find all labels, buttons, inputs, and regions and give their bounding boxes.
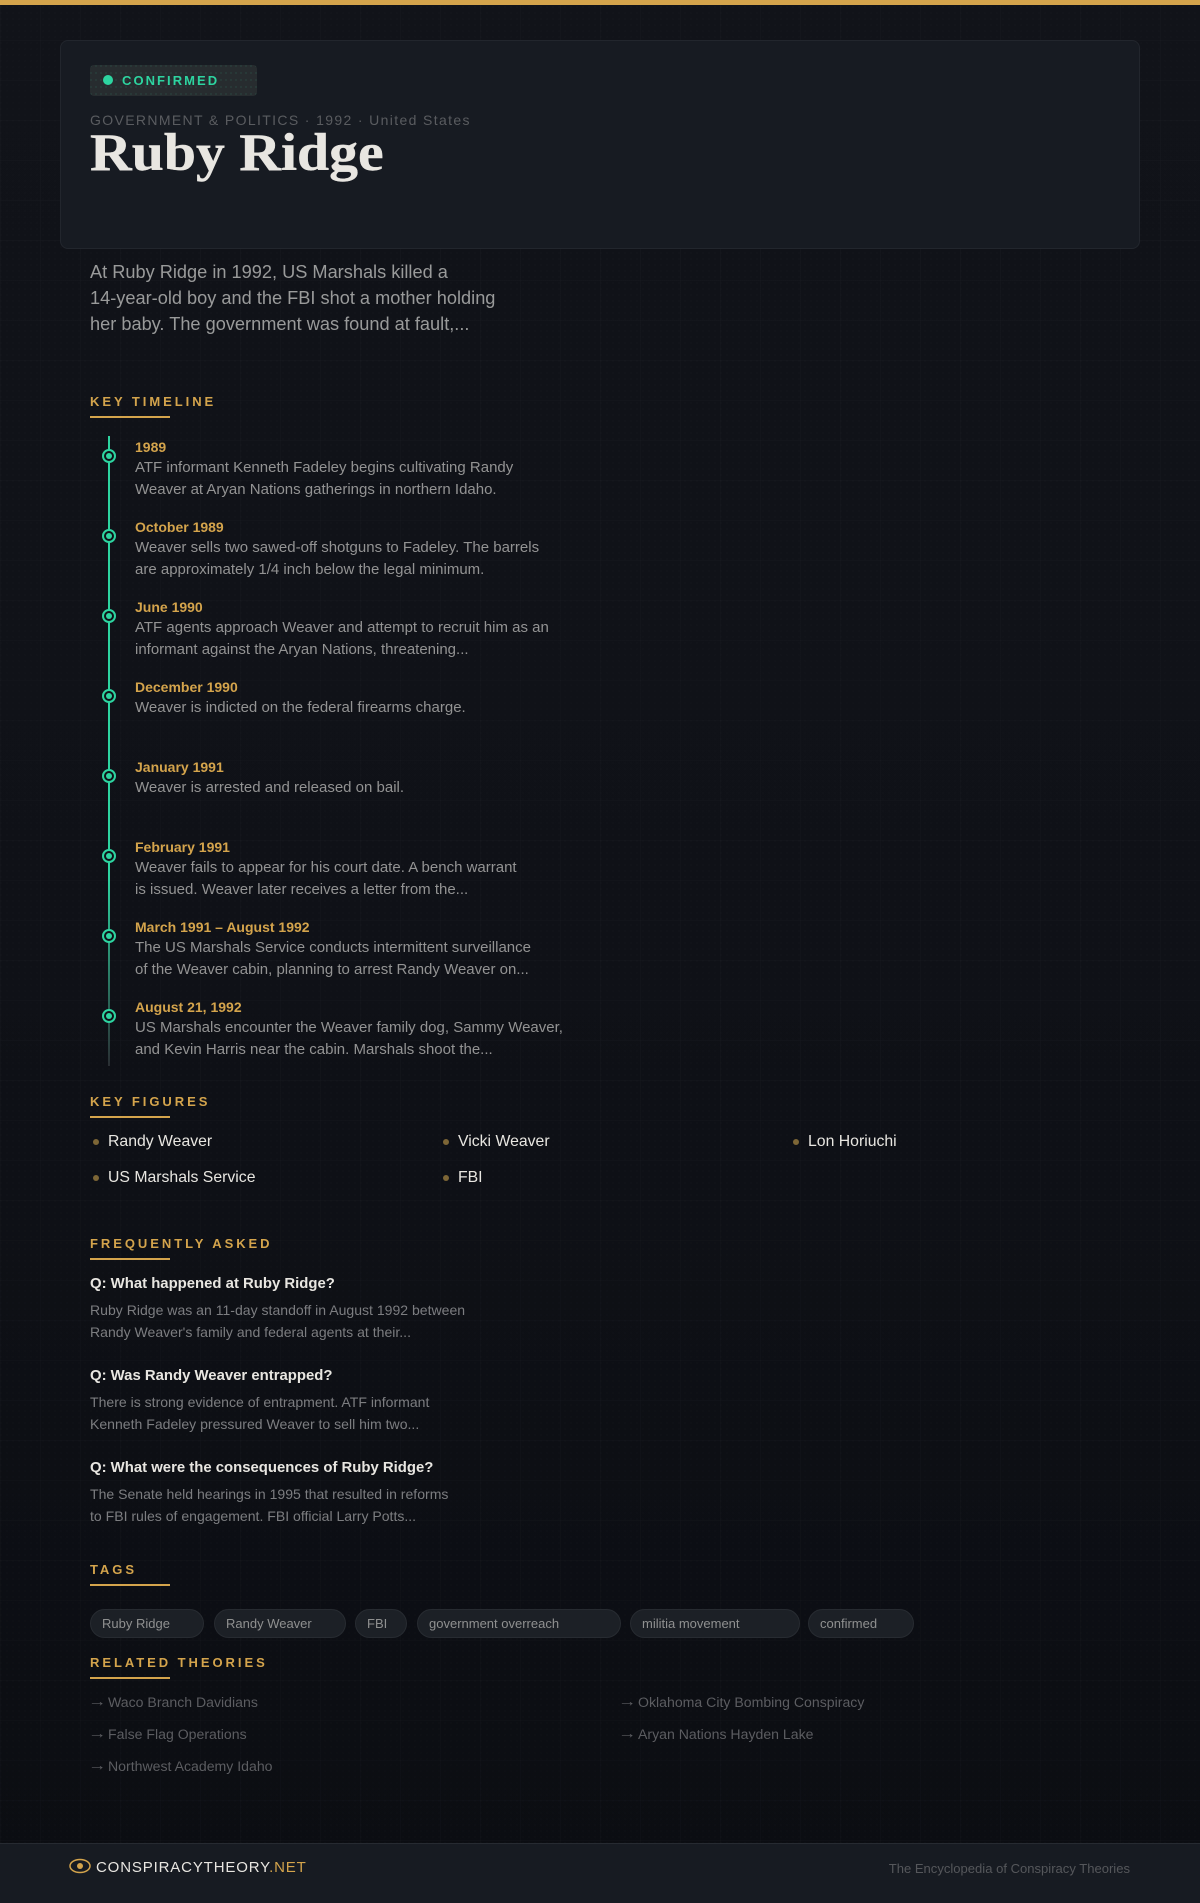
top accent bar <box>0 0 1200 5</box>
marker <box>102 689 116 703</box>
timeline item February 1991 <box>102 839 517 898</box>
badge dot <box>103 75 113 85</box>
timeline item October 1989: Weaver sells two sawed-off shotguns to Fadeley. The barrels <box>135 539 539 556</box>
timeline item October 1989 <box>102 519 539 578</box>
marker <box>102 849 116 863</box>
timeline item January 1991: Weaver is arrested and released on bail. <box>135 779 404 796</box>
timeline item June 1990: informant against the Aryan Nations, threatening... <box>135 641 469 658</box>
faq 3: The Senate held hearings in 1995 that resulted in reforms <box>90 1486 448 1502</box>
timeline line <box>108 436 110 1066</box>
faq 1: Randy Weaver's family and federal agents at their... <box>90 1324 411 1340</box>
timeline item June 1990 <box>102 599 549 658</box>
figure: Vicki Weaver: Vicki Weaver <box>458 1133 550 1150</box>
tag <box>417 1609 621 1638</box>
related link: → <box>88 1757 106 1773</box>
timeline item March 1991 – August 1992: March 1991 – August 1992 <box>135 919 310 935</box>
faq 2: There is strong evidence of entrapment. ATF informant <box>90 1394 429 1410</box>
related link: Aryan Nations Hayden Lake <box>638 1726 814 1742</box>
timeline item October 1989: October 1989 <box>135 519 224 535</box>
marker <box>102 1009 116 1023</box>
timeline item 1989: 1989 <box>135 439 166 455</box>
title: Ruby Ridge <box>90 124 384 182</box>
brand name: CONSPIRACYTHEORY.NET <box>96 1859 307 1876</box>
timeline item August 21, 1992: August 21, 1992 <box>135 999 242 1015</box>
figure: FBI: FBI <box>458 1169 483 1186</box>
intro text: 14-year-old boy and the FBI shot a mother holding <box>90 288 495 308</box>
tag: confirmed <box>820 1616 877 1631</box>
timeline item March 1991 – August 1992: of the Weaver cabin, planning to arrest Randy Weaver on... <box>135 961 529 978</box>
marker <box>102 529 116 543</box>
intro text: At Ruby Ridge in 1992, US Marshals killed a <box>90 262 448 282</box>
timeline item August 21, 1992: US Marshals encounter the Weaver family dog, Sammy Weaver, <box>135 1019 563 1036</box>
tag: Ruby Ridge <box>102 1616 170 1631</box>
footer tagline: The Encyclopedia of Conspiracy Theories <box>889 1861 1130 1876</box>
tag: Randy Weaver <box>226 1616 312 1631</box>
heading: key timeline: KEY TIMELINE <box>90 394 216 409</box>
timeline item 1989 <box>102 439 514 498</box>
faq 3: Q: What were the consequences of Ruby Ridge? <box>90 1460 433 1476</box>
figure: US Marshals Service: US Marshals Service <box>108 1169 255 1186</box>
related link: → <box>88 1693 106 1709</box>
related link: → <box>618 1725 636 1741</box>
tag <box>808 1609 914 1638</box>
related link: False Flag Operations <box>108 1726 247 1742</box>
category line: GOVERNMENT & POLITICS · 1992 · United States <box>90 112 471 128</box>
timeline item March 1991 – August 1992: The US Marshals Service conducts intermittent surveillance <box>135 939 531 956</box>
panel: header card <box>60 40 1140 249</box>
faq 2 <box>90 1368 430 1432</box>
tag <box>90 1609 204 1638</box>
marker <box>102 609 116 623</box>
timeline item February 1991: is issued. Weaver later receives a letter from the... <box>135 881 468 898</box>
timeline item August 21, 1992: and Kevin Harris near the cabin. Marshals shoot the... <box>135 1041 493 1058</box>
icon: eye logo <box>69 1858 91 1874</box>
timeline item 1989: ATF informant Kenneth Fadeley begins cultivating Randy <box>135 459 513 476</box>
related link: Northwest Academy Idaho <box>108 1758 273 1774</box>
related link: → <box>88 1725 106 1741</box>
related link: Oklahoma City Bombing Conspiracy <box>638 1694 864 1710</box>
tag: government overreach <box>429 1616 559 1631</box>
marker <box>102 449 116 463</box>
timeline item December 1990: Weaver is indicted on the federal firearms charge. <box>135 699 466 716</box>
timeline item October 1989: are approximately 1/4 inch below the legal minimum. <box>135 561 484 578</box>
badge label: CONFIRMED <box>122 73 219 88</box>
footer bar <box>0 1843 1200 1903</box>
marker <box>102 769 116 783</box>
faq 3 <box>90 1460 448 1524</box>
heading: frequently asked: FREQUENTLY ASKED <box>90 1236 273 1251</box>
heading: tags: TAGS <box>90 1562 137 1577</box>
faq 1: Ruby Ridge was an 11-day standoff in August 1992 between <box>90 1302 465 1318</box>
faq 2: Kenneth Fadeley pressured Weaver to sell him two... <box>90 1416 419 1432</box>
status badge <box>90 65 257 96</box>
tag <box>630 1609 800 1638</box>
timeline item January 1991: January 1991 <box>135 759 224 775</box>
faq 3: to FBI rules of engagement. FBI official Larry Potts... <box>90 1508 416 1524</box>
intro text <box>90 262 495 334</box>
timeline item 1989: Weaver at Aryan Nations gatherings in northern Idaho. <box>135 481 497 498</box>
marker <box>102 929 116 943</box>
timeline item December 1990 <box>102 679 466 716</box>
faq 2: Q: Was Randy Weaver entrapped? <box>90 1368 332 1384</box>
tag <box>355 1609 407 1638</box>
tag: militia movement <box>642 1616 740 1631</box>
timeline item June 1990: ATF agents approach Weaver and attempt to recruit him as an <box>135 619 549 636</box>
faq 1 <box>90 1276 465 1340</box>
timeline item March 1991 – August 1992 <box>102 919 531 978</box>
timeline item January 1991 <box>102 759 404 796</box>
timeline item June 1990: June 1990 <box>135 599 203 615</box>
tag <box>214 1609 346 1638</box>
timeline item December 1990: December 1990 <box>135 679 238 695</box>
timeline item August 21, 1992 <box>102 999 563 1058</box>
tag: FBI <box>367 1616 387 1631</box>
related link: Waco Branch Davidians <box>108 1694 258 1710</box>
figure: Lon Horiuchi: Lon Horiuchi <box>808 1133 897 1150</box>
heading: related theories: RELATED THEORIES <box>90 1655 268 1670</box>
timeline item February 1991: February 1991 <box>135 839 230 855</box>
heading: key figures: KEY FIGURES <box>90 1094 210 1109</box>
related link: → <box>618 1693 636 1709</box>
figure: Randy Weaver: Randy Weaver <box>108 1133 212 1150</box>
intro text: her baby. The government was found at fault,... <box>90 314 469 334</box>
timeline item February 1991: Weaver fails to appear for his court date. A bench warrant <box>135 859 517 876</box>
faq 1: Q: What happened at Ruby Ridge? <box>90 1276 335 1292</box>
